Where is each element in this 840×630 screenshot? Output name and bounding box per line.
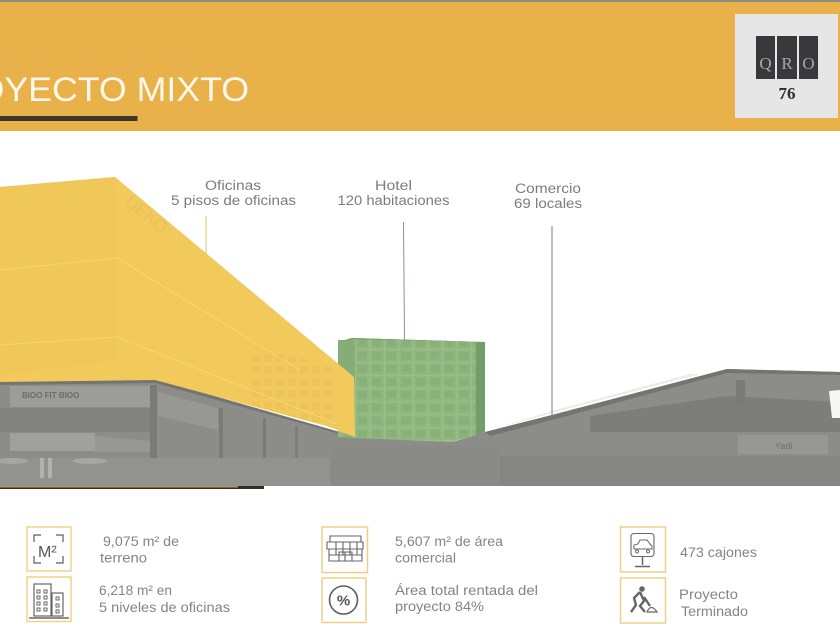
text: area comercial: comercial [395,550,456,566]
leader line: oficinas [205,216,207,254]
text: terminado: Terminado [681,604,748,619]
text: terreno [100,534,179,566]
stat: terminado [620,578,748,623]
building photo: commercial base: Yadi [775,441,792,451]
icon: m2 [27,527,71,571]
icon: percent: % [337,592,350,610]
icon: buildings [27,577,71,622]
leader line: hotel [404,222,405,340]
text: cajones: 473 cajones [680,545,757,560]
hotel block (green) [338,338,485,442]
office block (yellow): UEKO [122,192,171,237]
icon: construction worker [620,578,666,623]
stat: cajones [620,527,757,572]
text: terminado [679,587,748,619]
logo [735,14,838,118]
office wedge over hotel edge [330,357,355,437]
label: hotel: 120 habitaciones [338,193,450,208]
label: hotel [338,178,450,208]
label: comercio: Comercio [515,181,581,196]
label: comercio [514,181,582,211]
label: oficinas: 5 pisos de oficinas [171,193,296,208]
stat: terreno [27,527,179,571]
icon: storefront [322,527,368,572]
text: area comercial [395,534,504,566]
stat: area comercial [322,527,504,572]
text: area rentada [395,583,538,614]
office block (yellow) [0,177,355,437]
building photo: commercial base: BIOO FIT BIOO [22,391,79,400]
text: area rentada: proyecto 84% [395,599,484,614]
logo: O [802,54,815,73]
text: terreno: 9,075 m² de [103,534,179,549]
icon: parking sign [620,527,666,572]
text: oficinas: 5 niveles de oficinas [99,600,230,615]
text: area rentada: Área total rentada del [395,583,538,598]
label: hotel: Hotel [375,178,412,193]
text: oficinas: 6,218 m² en [99,583,172,598]
label: comercio: 69 locales [514,196,582,211]
text: oficinas [99,583,230,615]
icon: m2: M² [38,544,57,561]
text: terreno: terreno [100,550,147,566]
text: terminado: Proyecto [679,587,738,602]
building photo: commercial base [0,369,840,486]
logo: R [781,54,793,73]
stat: oficinas [27,577,230,622]
dark strip under photo [0,486,264,489]
label: oficinas: Oficinas [205,178,261,193]
logo: Q [759,54,772,73]
title underline [0,116,138,121]
icon: percent [322,578,366,622]
logo: 76 [778,84,796,103]
stat: area rentada [322,578,538,622]
label: oficinas [171,178,296,208]
header band [0,0,840,131]
leader line: comercio [551,226,553,415]
text: area comercial: 5,607 m² de área [395,534,504,549]
